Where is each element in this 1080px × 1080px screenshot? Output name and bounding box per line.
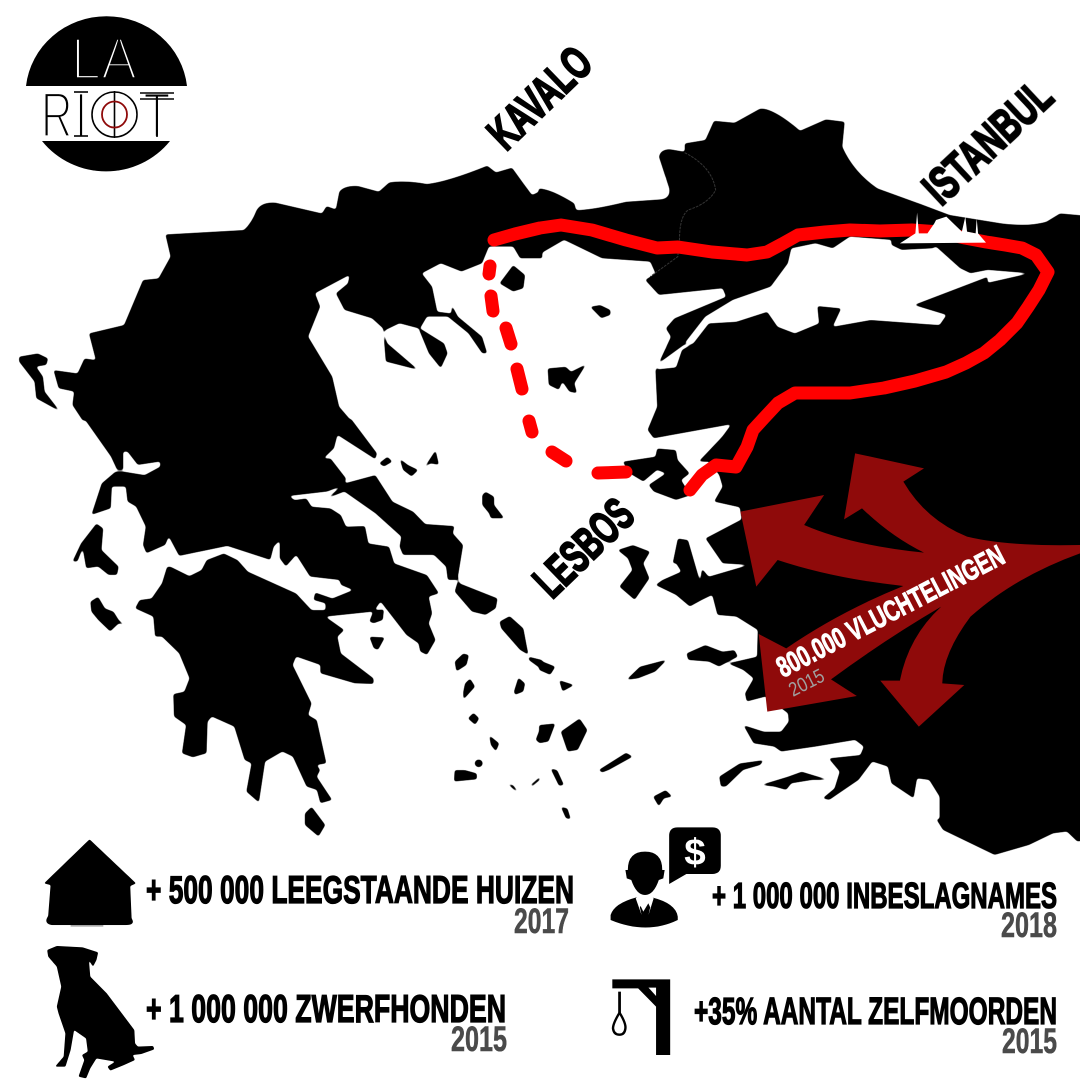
refugee arrow label xyxy=(771,540,1010,701)
stat: stray dogs: 2015 xyxy=(451,1020,507,1059)
stat: empty houses: + 500 000 LEEGSTAANDE HUIZEN xyxy=(146,869,574,912)
Thrace, Marmara and Anatolia north xyxy=(538,108,1080,462)
refugee arrow label: 2015 xyxy=(785,665,828,701)
Thrace border line xyxy=(650,153,716,277)
map: Greece and western Turkey xyxy=(19,108,1080,855)
icon: Istanbul skyline xyxy=(900,213,986,243)
stat: empty houses xyxy=(146,869,574,941)
south-west Anatolia coast tip xyxy=(936,819,1080,855)
logo: La Riot xyxy=(26,16,187,171)
logo: La Riot: RIOT xyxy=(41,79,170,151)
icon: businessman with dollar speech bubble: $ xyxy=(684,832,706,873)
label: Lesbos: LESBOS xyxy=(523,488,644,607)
stat: foreclosures: 2018 xyxy=(1001,906,1057,945)
logo: La Riot: LA xyxy=(71,26,138,92)
icon: dog xyxy=(47,946,154,1078)
icon: gallows xyxy=(612,979,670,1055)
stat: empty houses: 2017 xyxy=(514,902,569,941)
stat: suicides: 2015 xyxy=(1002,1022,1057,1061)
stat: stray dogs xyxy=(146,988,507,1059)
arrows: refugee flows xyxy=(740,453,1080,727)
route: sea crossing dashes xyxy=(489,266,626,473)
central Greece, Peloponnese and western islands xyxy=(72,419,542,837)
icon: businessman with dollar speech bubble xyxy=(611,827,721,927)
icon: house xyxy=(44,839,136,927)
stat: foreclosures xyxy=(712,875,1057,945)
stat: suicides xyxy=(694,991,1057,1061)
northern Greece and Epirus mainland xyxy=(19,166,542,421)
Anatolia south-west coast and eastern Aegean islands xyxy=(539,429,1080,821)
route: land route Lesbos to Istanbul to Kavala xyxy=(494,225,1048,490)
stat: stray dogs: + 1 000 000 ZWERFHONDEN xyxy=(146,988,506,1031)
